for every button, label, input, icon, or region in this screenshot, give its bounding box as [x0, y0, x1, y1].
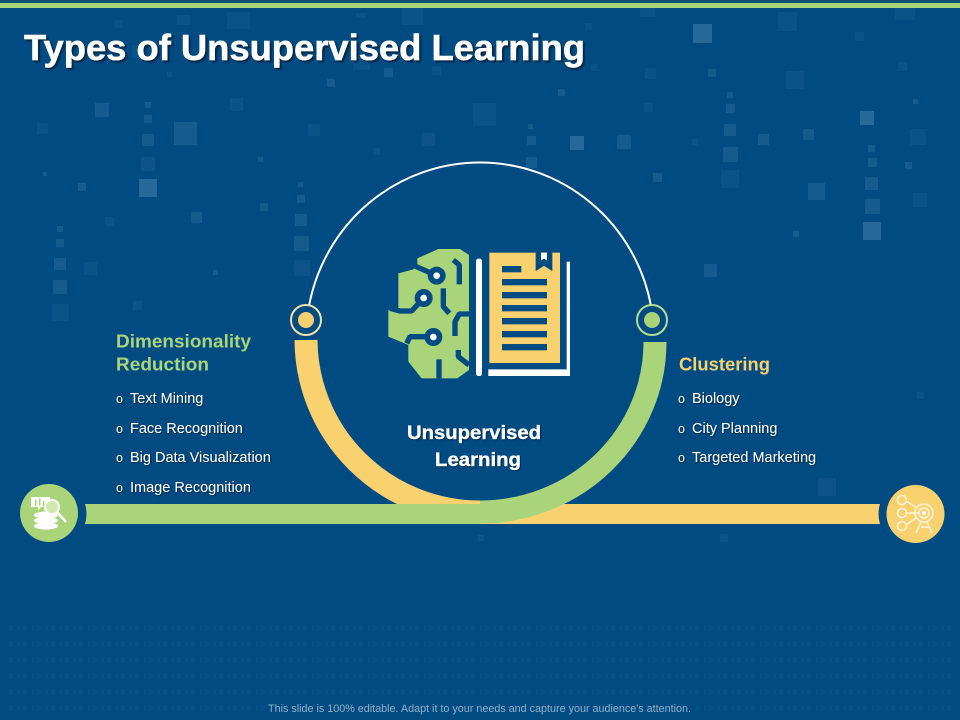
yellow bar	[480, 504, 880, 524]
icon: target	[886, 485, 944, 543]
green bar	[85, 504, 480, 524]
top accent bar	[0, 3, 960, 8]
list: dimensionality reduction: Big Data Visualization	[130, 450, 271, 466]
green arc	[480, 342, 655, 512]
top band	[0, 0, 960, 3]
heading: dimensionality reduction	[116, 332, 251, 374]
list: dimensionality reduction: o	[116, 422, 123, 436]
icon: brain and book	[388, 249, 570, 378]
left node	[291, 305, 321, 335]
list: dimensionality reduction: Text Mining	[130, 391, 203, 407]
list: clustering: o	[678, 422, 685, 436]
list: clustering: o	[678, 451, 685, 465]
white arc	[309, 163, 651, 306]
heading: dimensionality reduction: Reduction	[116, 354, 209, 374]
list: clustering: Biology	[692, 391, 740, 407]
heading: dimensionality reduction: Dimensionality	[116, 332, 251, 352]
binary pattern footer	[8, 625, 952, 720]
right node	[637, 305, 667, 335]
list: clustering: o	[678, 392, 685, 406]
footer note: This slide is 100% editable. Adapt it to your needs and capture your audience's attention.	[268, 703, 691, 715]
list: dimensionality reduction: Image Recognition	[130, 480, 251, 496]
title: Types of Unsupervised Learning	[24, 27, 585, 68]
list: dimensionality reduction: Face Recognition	[130, 421, 243, 437]
list: dimensionality reduction: o	[116, 451, 123, 465]
list: clustering: Targeted Marketing	[692, 450, 816, 466]
heading: clustering: Clustering	[679, 354, 770, 374]
list: clustering: City Planning	[692, 421, 777, 437]
yellow arc	[306, 340, 480, 512]
list: dimensionality reduction: o	[116, 392, 123, 406]
list: clustering	[678, 391, 816, 466]
center label: Unsupervised	[407, 422, 541, 444]
book	[476, 253, 570, 376]
brain	[388, 249, 469, 378]
center label: Learning	[435, 449, 521, 471]
list: dimensionality reduction: o	[116, 481, 123, 495]
list: dimensionality reduction	[116, 391, 271, 496]
icon: data analysis	[20, 484, 78, 542]
center label	[407, 422, 541, 471]
